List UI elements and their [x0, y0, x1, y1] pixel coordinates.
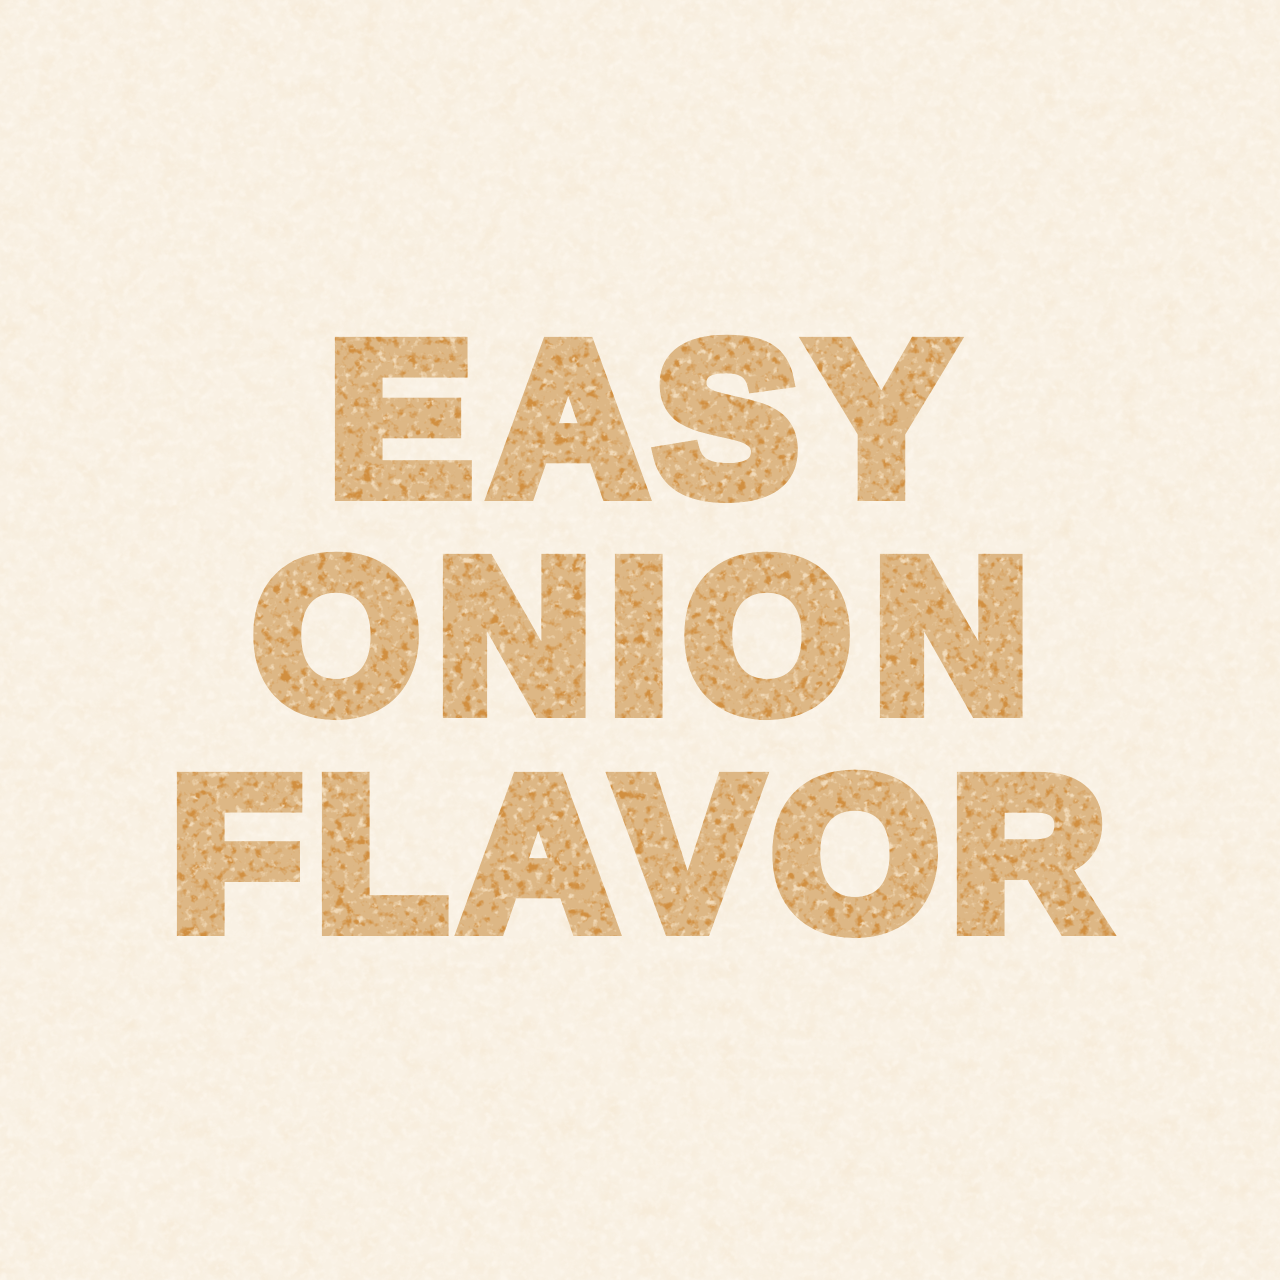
title line: FLAVOR: FLAVOR: [171, 734, 1106, 974]
title line: ONION: ONION: [253, 516, 1029, 756]
title: EASY ONION FLAVOR: [171, 300, 1106, 974]
title line: EASY: EASY: [329, 300, 953, 538]
